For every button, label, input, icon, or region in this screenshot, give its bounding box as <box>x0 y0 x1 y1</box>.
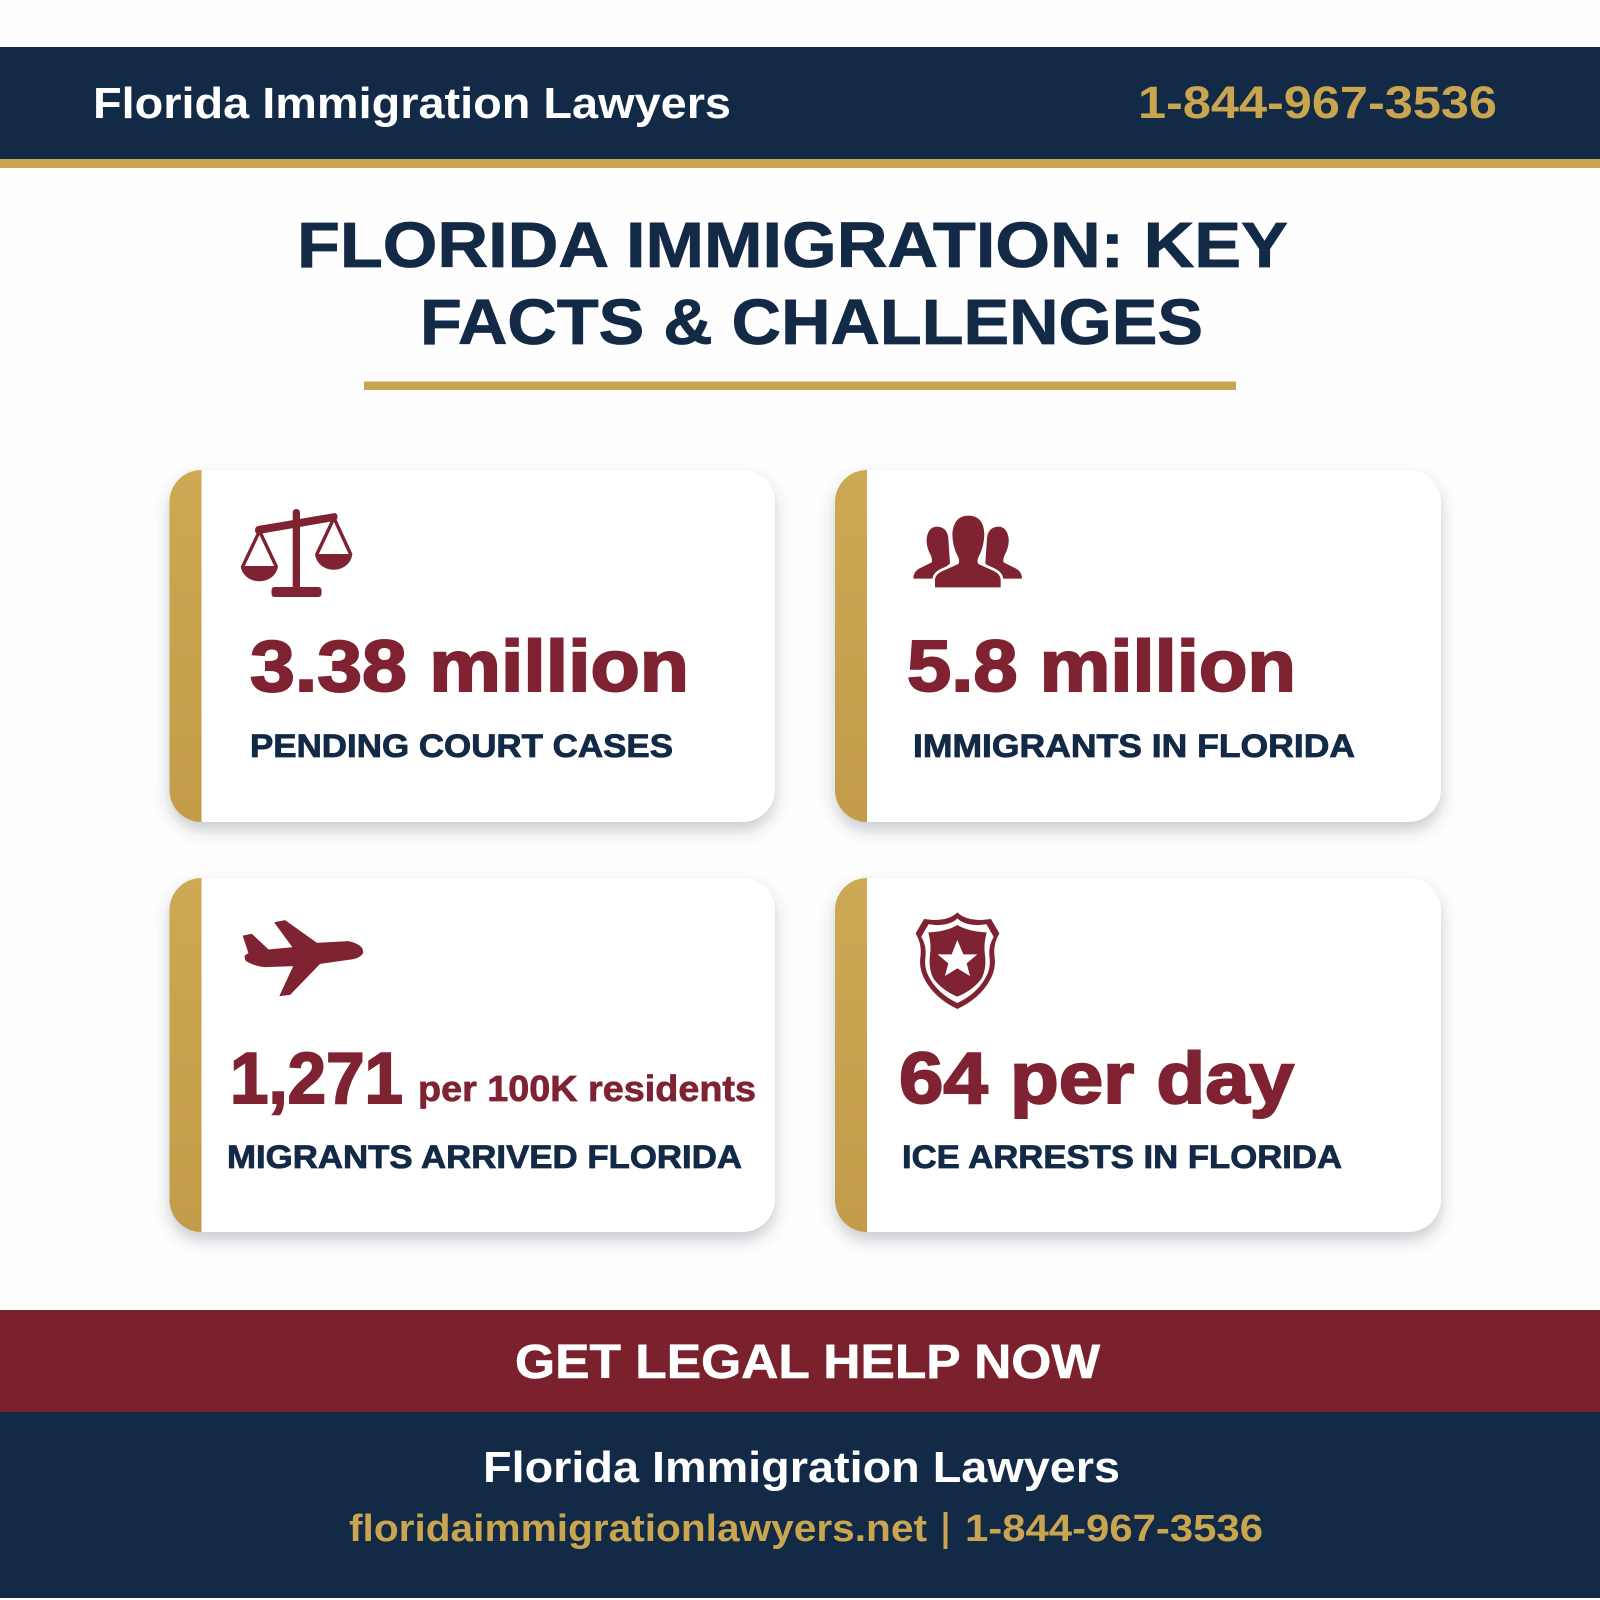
stat label: IMMIGRANTS IN FLORIDA <box>913 728 1355 764</box>
footer firm name: Florida Immigration Lawyers <box>483 1443 1120 1492</box>
call-to-action bar <box>0 1310 1600 1412</box>
title: FACTS & CHALLENGES <box>420 286 1203 358</box>
stat value: 5.8 million <box>907 627 1296 707</box>
icon: police shield <box>916 912 999 1009</box>
call-to-action bar: GET LEGAL HELP NOW <box>515 1336 1101 1389</box>
stat value: 64 per day <box>899 1039 1294 1119</box>
panel: immigrants in Florida <box>835 470 1441 822</box>
panel: migrants arrived Florida <box>170 878 775 1232</box>
stat label: PENDING COURT CASES <box>250 728 673 764</box>
footer bar <box>0 1412 1600 1598</box>
stat value: 1,271 <box>230 1039 403 1119</box>
stat label: MIGRANTS ARRIVED FLORIDA <box>227 1139 742 1175</box>
title <box>297 209 1288 358</box>
panel: pending court cases <box>170 470 775 822</box>
stat label: ICE ARRESTS IN FLORIDA <box>902 1139 1342 1175</box>
panel: ICE arrests <box>835 878 1441 1232</box>
footer website and phone <box>349 1508 1263 1550</box>
icon: scales of justice <box>241 509 352 597</box>
stat value: 3.38 million <box>250 627 689 707</box>
icon: airplane <box>243 921 363 996</box>
header phone number: 1-844-967-3536 <box>1138 77 1497 128</box>
footer website and phone: 1-844-967-3536 <box>965 1508 1263 1550</box>
footer website and phone: floridaimmigrationlawyers.net <box>349 1508 927 1550</box>
header firm name: Florida Immigration Lawyers <box>93 79 731 128</box>
top header bar <box>0 47 1600 168</box>
icon: group of people <box>913 516 1022 587</box>
title: FLORIDA IMMIGRATION: KEY <box>297 209 1288 281</box>
stat unit: per 100K residents <box>418 1068 756 1109</box>
